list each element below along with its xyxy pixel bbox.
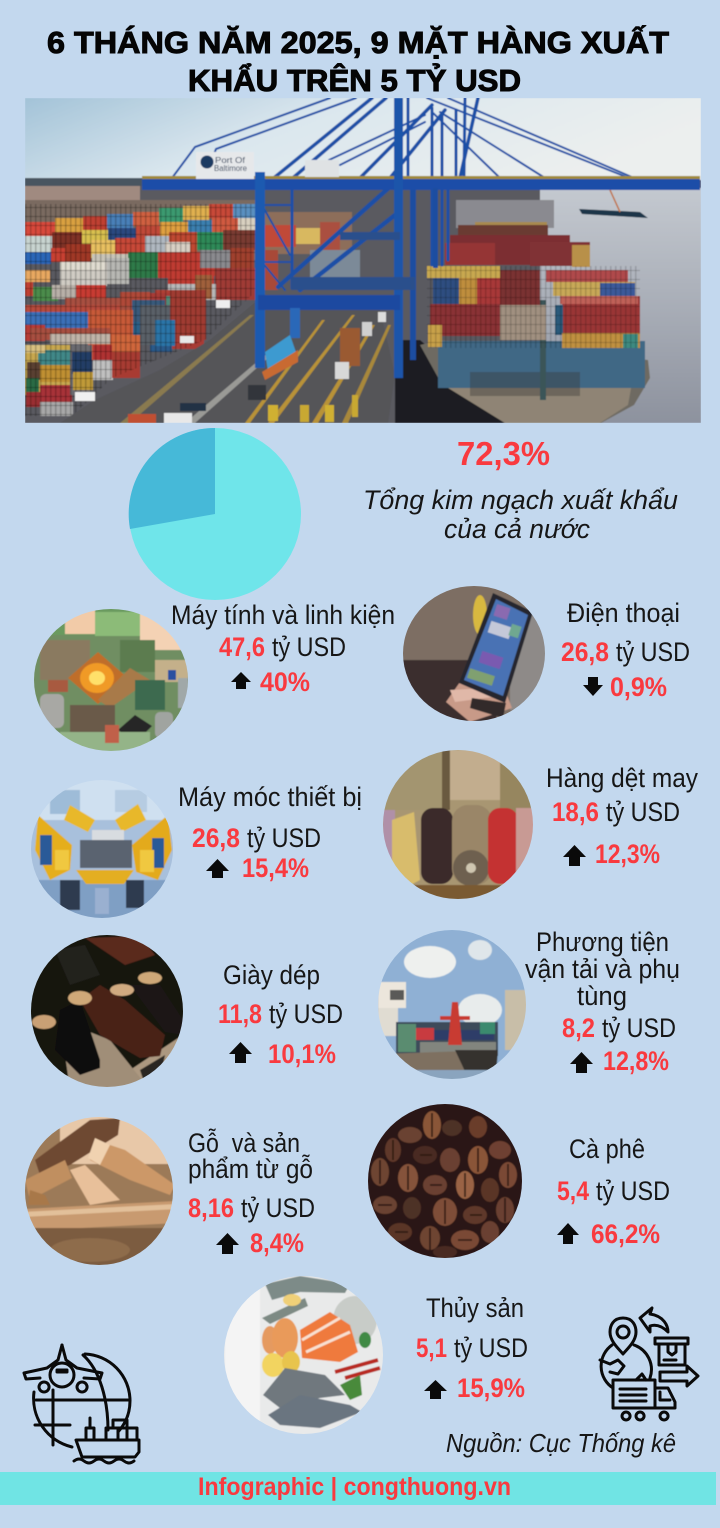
- photo: split logs: [22, 1114, 177, 1268]
- photo: fabric rolls: [380, 748, 536, 903]
- name: tùng: [577, 981, 627, 1011]
- photo: smartphone: [400, 584, 550, 724]
- title: [47, 25, 669, 98]
- name: Máy móc thiết bị: [178, 782, 362, 812]
- pie figure 72,3%: 72,3%: [457, 435, 550, 472]
- icon: up arrow: [229, 1042, 252, 1063]
- icon: up arrow: [424, 1380, 447, 1399]
- name: Giày dép: [223, 960, 320, 990]
- item: phones: [400, 584, 690, 724]
- yard near stack: [25, 345, 70, 395]
- value: 8,2: [562, 1013, 595, 1043]
- unit: tỷ USD: [596, 1176, 670, 1206]
- item: textiles: [380, 748, 698, 903]
- item: machinery: [28, 778, 362, 923]
- change: 0,9%: [610, 672, 667, 702]
- change: 12,8%: [603, 1046, 669, 1076]
- name: Phương tiện: [536, 927, 669, 957]
- unit: tỷ USD: [454, 1333, 528, 1363]
- value: 8,16: [188, 1193, 234, 1223]
- pie caption: Tổng kim ngạch xuất khẩu: [363, 485, 678, 515]
- photo: coffee beans: [365, 1100, 525, 1260]
- change: 15,9%: [457, 1373, 525, 1403]
- mid yard behind crane: [262, 212, 352, 254]
- photo: robots: [31, 780, 173, 918]
- hero photo: container port: Port Of: [215, 156, 246, 165]
- name: Máy tính và linh kiện: [171, 600, 395, 630]
- icon: up arrow: [557, 1223, 579, 1244]
- change: 66,2%: [591, 1219, 660, 1249]
- unit: tỷ USD: [606, 797, 680, 827]
- unit: tỷ USD: [272, 632, 346, 662]
- value: 5,1: [416, 1333, 447, 1363]
- change: 10,1%: [268, 1039, 336, 1069]
- icon: up arrow: [570, 1052, 593, 1073]
- source note: Nguồn: Cục Thống kê: [446, 1428, 676, 1458]
- crane blue: [172, 98, 632, 293]
- pie caption: [363, 485, 678, 544]
- ship shadow + deck: [394, 340, 504, 423]
- icon: up arrow: [216, 1233, 239, 1254]
- item: wood: [22, 1114, 315, 1268]
- icon: up arrow: [563, 845, 586, 866]
- photo: cargo ship: [375, 928, 530, 1085]
- unit: tỷ USD: [616, 637, 690, 667]
- footer credit: Infographic | congthuong.vn: [198, 1473, 511, 1501]
- item: computers: [30, 600, 395, 755]
- name: Gỗ và sản: [188, 1127, 300, 1158]
- unit: tỷ USD: [269, 999, 343, 1029]
- water: [540, 188, 701, 423]
- icon: up arrow: [206, 859, 229, 878]
- item: seafood: [220, 1272, 528, 1438]
- white vehicles: [216, 300, 230, 308]
- change: 40%: [260, 667, 310, 697]
- icon: logistics globe, box and truck: [600, 1308, 698, 1420]
- icon: up arrow: [231, 672, 251, 689]
- value: 5,4: [557, 1176, 589, 1206]
- name: [188, 1127, 313, 1184]
- photo: leather shoes: [28, 932, 190, 1090]
- item: coffee: [365, 1100, 670, 1260]
- unit: tỷ USD: [241, 1193, 315, 1223]
- title: KHẨU TRÊN 5 TỶ USD: [188, 62, 521, 98]
- footer band: [0, 1472, 716, 1505]
- value: 11,8: [218, 999, 262, 1029]
- name: vận tải và phụ: [525, 954, 680, 984]
- pie caption: của cả nước: [444, 514, 590, 544]
- name: Hàng dệt may: [546, 763, 698, 793]
- name: phẩm từ gỗ: [188, 1153, 313, 1184]
- hero photo: container port: Baltimore: [214, 164, 248, 173]
- value: 47,6: [219, 632, 265, 662]
- name: [525, 927, 680, 1011]
- pie chart: 72,3%: [129, 428, 301, 600]
- container rib texture: [25, 204, 257, 416]
- yard far containers: [25, 204, 258, 375]
- photo: seafood on ice: [220, 1272, 388, 1438]
- sign: [196, 152, 254, 179]
- title: 6 THÁNG NĂM 2025, 9 MẶT HÀNG XUẤT: [47, 25, 669, 60]
- ship containers: [456, 200, 554, 228]
- change: 8,4%: [250, 1228, 304, 1258]
- name: Điện thoại: [567, 598, 680, 628]
- unit: tỷ USD: [247, 823, 321, 853]
- name: Thủy sản: [426, 1293, 524, 1323]
- name: Cà phê: [569, 1134, 645, 1164]
- hero photo: container port: [25, 98, 701, 423]
- unit: tỷ USD: [602, 1013, 676, 1043]
- value: 26,8: [192, 823, 240, 853]
- road: [70, 314, 386, 422]
- item: footwear: [28, 932, 343, 1090]
- item: vehicles: [375, 927, 680, 1085]
- icon: plane, globe and ship: [24, 1345, 139, 1463]
- icon: down arrow: [583, 677, 603, 696]
- value: 26,8: [561, 637, 609, 667]
- change: 12,3%: [595, 839, 660, 869]
- value: 18,6: [552, 797, 599, 827]
- change: 15,4%: [242, 853, 309, 883]
- photo: circuit board: [34, 609, 188, 751]
